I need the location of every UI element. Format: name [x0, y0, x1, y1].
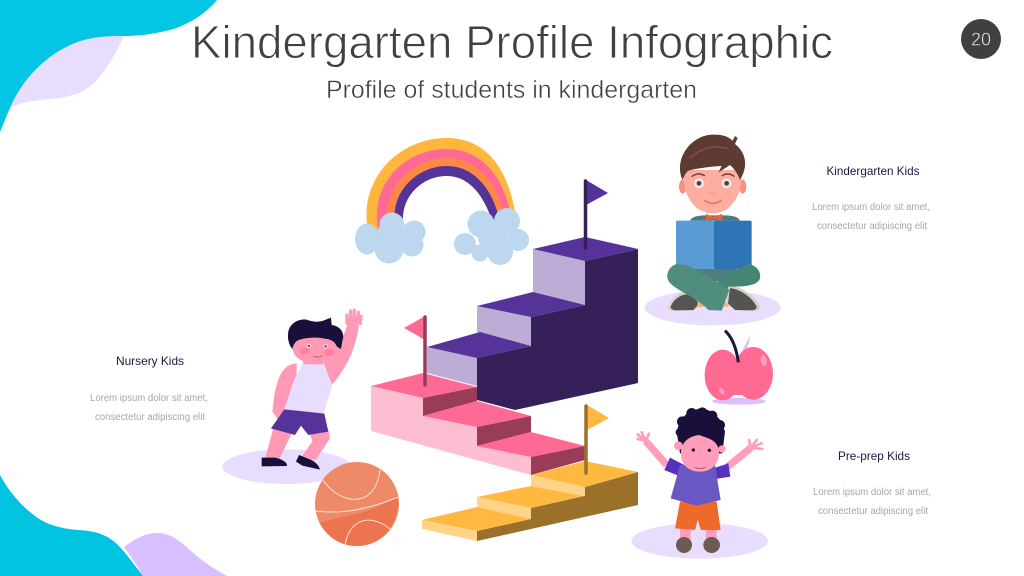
top-left lilac blob	[10, 30, 124, 108]
pre-prep kid	[631, 407, 768, 559]
label: Nursery Kids	[90, 354, 208, 423]
label: Kindergarten Kids	[812, 164, 930, 232]
label: Nursery Kids: consectetur adipiscing elit	[95, 412, 205, 423]
label: Pre-prep Kids: Lorem ipsum dolor sit amet,	[813, 487, 931, 498]
nursery kid	[222, 310, 361, 484]
kindergarten boy with book	[645, 135, 781, 325]
page number badge	[961, 19, 1001, 59]
apple	[705, 331, 773, 405]
label: Kindergarten Kids: Kindergarten Kids	[826, 164, 920, 178]
purple staircase	[427, 237, 638, 410]
yellow staircase	[422, 461, 638, 541]
label: Nursery Kids: Nursery Kids	[116, 354, 184, 368]
subtitle: Profile of students in kindergarten	[326, 76, 697, 104]
label: Pre-prep Kids: consectetur adipiscing elit	[818, 506, 928, 517]
label: Nursery Kids: Lorem ipsum dolor sit amet,	[90, 393, 208, 404]
label: Kindergarten Kids: Lorem ipsum dolor sit amet,	[812, 202, 930, 213]
label: Pre-prep Kids: Pre-prep Kids	[838, 449, 910, 463]
purple flag	[586, 180, 608, 248]
label: Kindergarten Kids: consectetur adipiscing elit	[817, 221, 927, 232]
bottom-left cyan blob	[0, 475, 143, 576]
top-left cyan blob	[0, 0, 217, 132]
pink flag	[404, 316, 425, 385]
label: Pre-prep Kids	[813, 449, 931, 517]
pink staircase	[371, 373, 585, 475]
basketball	[315, 462, 399, 546]
bottom-left lilac blob	[124, 533, 227, 576]
rainbow	[366, 138, 516, 245]
yellow flag	[586, 405, 609, 473]
page number badge: 20	[971, 30, 991, 50]
right cloud	[454, 208, 529, 265]
left cloud	[355, 212, 426, 264]
title: Kindergarten Profile Infographic	[191, 16, 833, 68]
